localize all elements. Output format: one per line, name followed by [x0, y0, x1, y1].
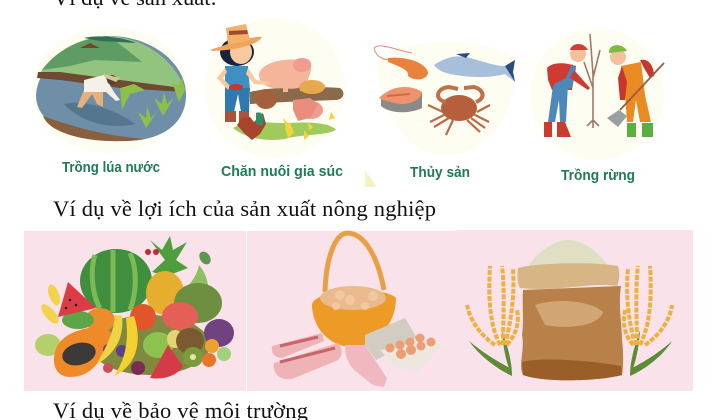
illustration: egg basket, meat and egg carton: [272, 233, 443, 387]
illustration: farmer with livestock: [205, 18, 345, 158]
illustration: fruit pile: [35, 236, 234, 378]
panel: meat and eggs: [247, 231, 456, 391]
panel: fruit: [24, 231, 246, 391]
panel background: [456, 230, 693, 391]
label: livestock: Chăn nuôi gia súc: [221, 163, 343, 180]
illustration: sack of rice with rice stalks: [467, 240, 672, 380]
illustration: seafood: [374, 42, 515, 155]
label: rice farming: Trồng lúa nước: [62, 159, 160, 176]
illustration: two foresters planting a tree: [530, 28, 664, 160]
panel: rice sack: [456, 230, 693, 391]
label: aquaculture: Thủy sản: [410, 164, 470, 181]
panel background: [247, 231, 456, 391]
panel background: [24, 231, 246, 391]
panel: aquaculture: [374, 42, 515, 181]
illustration: rice field: [32, 27, 188, 153]
decoration: small yellow triangle: [365, 170, 377, 187]
panel: afforestation: [530, 28, 664, 184]
label: afforestation: Trồng rừng: [561, 167, 635, 184]
panel: livestock: [205, 18, 345, 180]
panel: rice farming: [32, 27, 188, 176]
heading: benefits of agriculture: Ví dụ về lợi ích của sản xuất nông nghiệp: [53, 196, 436, 221]
